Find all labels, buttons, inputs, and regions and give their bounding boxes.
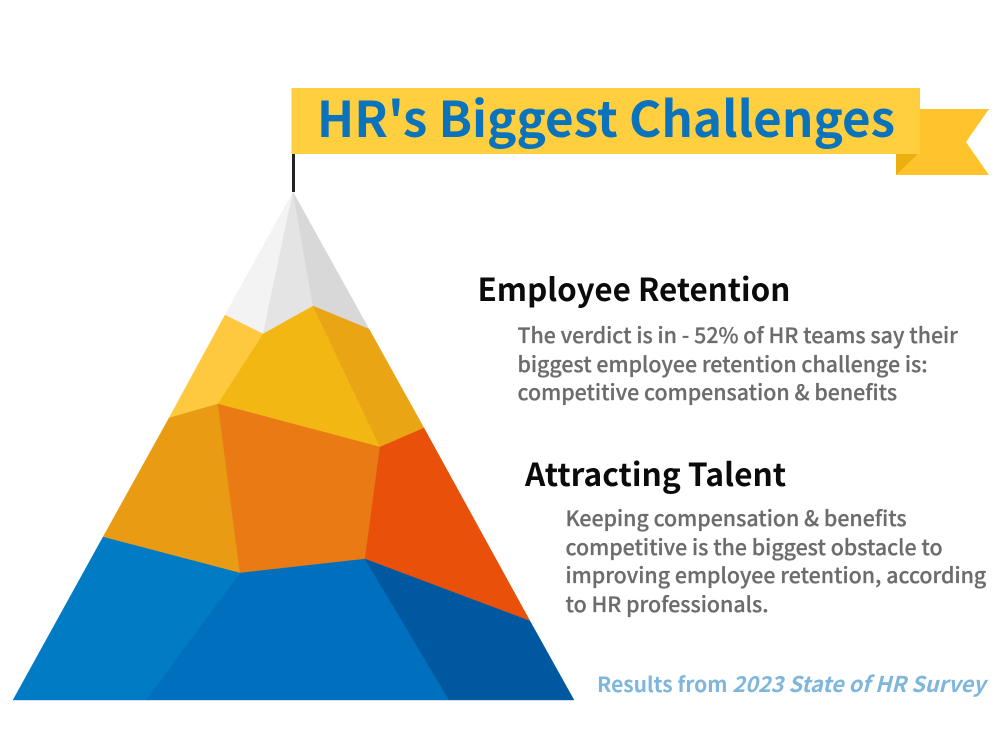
text block: attracting talent: to HR professionals. <box>566 588 769 618</box>
text block: attracting talent: improving employee retention, according <box>566 559 986 590</box>
banner ribbon tail <box>896 109 989 175</box>
banner <box>292 88 920 154</box>
text block: attracting talent: competitive is the biggest obstacle to <box>566 530 943 562</box>
text block: employee retention <box>518 319 958 407</box>
source note: Results from 2023 State of HR Survey <box>597 668 986 699</box>
heading: employee retention: Employee Retention <box>478 266 790 311</box>
icon: flag pole <box>292 150 295 192</box>
text block: attracting talent: Keeping compensation & benefits <box>566 502 907 533</box>
text block: employee retention: competitive compensation & benefits <box>518 376 897 407</box>
text block: employee retention: The verdict is in - 52% of HR teams say their <box>518 319 958 350</box>
heading: attracting talent: Attracting Talent <box>525 450 786 496</box>
pyramid <box>13 192 574 700</box>
text block: employee retention: biggest employee retention challenge is: <box>518 348 928 378</box>
text block: attracting talent <box>566 502 986 618</box>
title: HR's Biggest Challenges <box>317 81 895 152</box>
